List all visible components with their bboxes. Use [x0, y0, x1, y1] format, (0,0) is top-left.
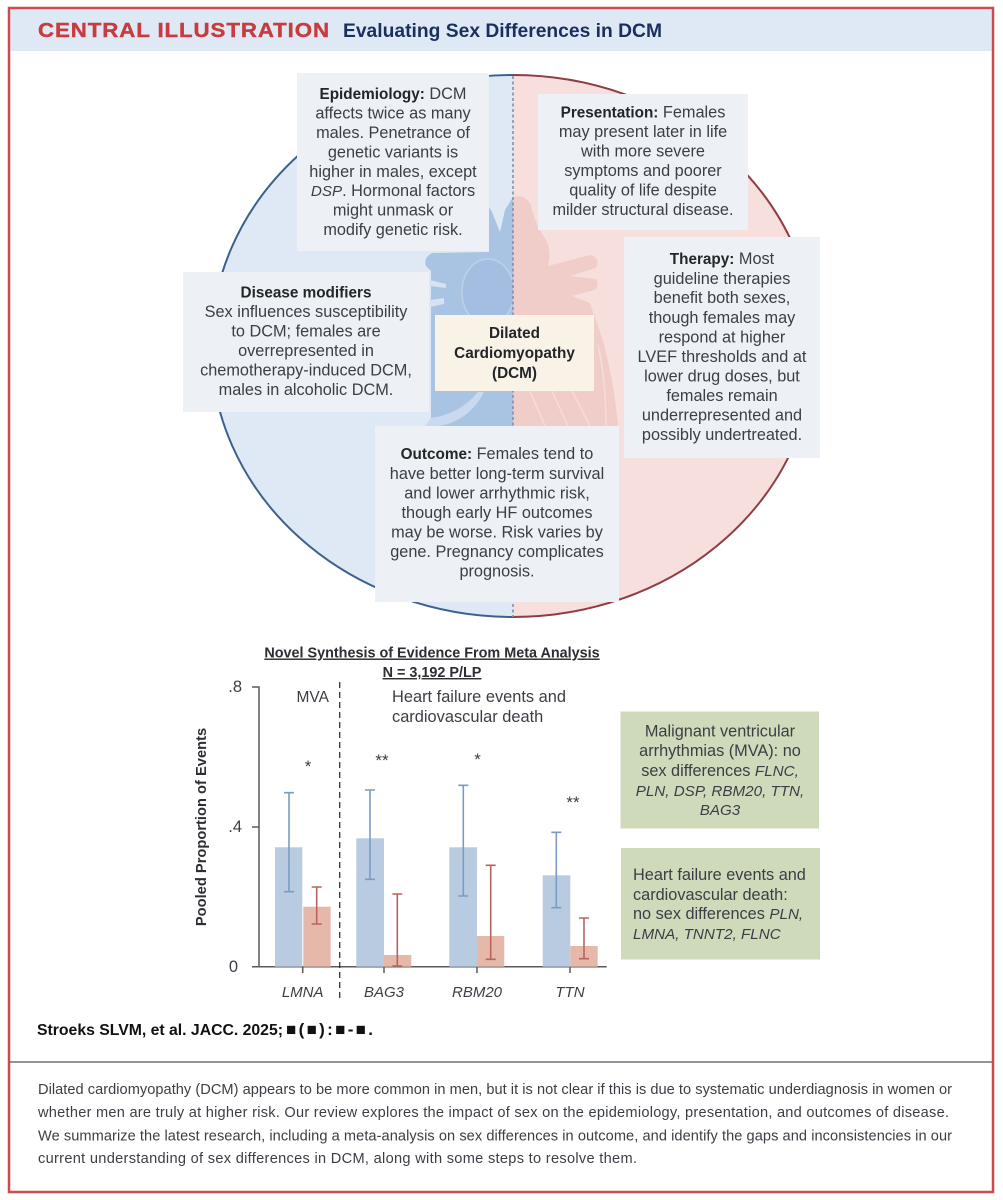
panel: disease modifiers: Sex influences susceptibility: [205, 303, 408, 321]
gene labels: BAG3: [364, 984, 405, 1001]
panel: epidemiology: affects twice as many: [315, 104, 472, 122]
bar chart: [194, 678, 607, 1001]
panel: dilated cardiomyopathy label: Cardiomyopathy: [454, 345, 575, 362]
panel: therapy: possibly undertreated.: [642, 426, 802, 444]
callout: heart failure events: no sex differences PLN,: [633, 905, 803, 923]
subtitle: Evaluating Sex Differences in DCM: [343, 20, 662, 42]
panel: outcome: and lower arrhythmic risk,: [404, 484, 590, 502]
panel: epidemiology: might unmask or: [333, 202, 454, 220]
callout: heart failure events: [621, 848, 820, 960]
female half: [513, 75, 815, 617]
citation: ■(■):■-■.: [286, 1020, 373, 1039]
summary text: [37, 1082, 952, 1167]
panel: therapy: [624, 237, 820, 458]
circle outline: female side: [513, 75, 815, 617]
significance markers: *: [305, 757, 312, 776]
panel: presentation: milder structural disease.: [553, 201, 733, 219]
panel: presentation: with more severe: [580, 142, 705, 160]
group labels: cardiovascular death: [392, 708, 543, 726]
header band: [10, 10, 992, 51]
callout: heart failure events: cardiovascular death:: [633, 886, 788, 904]
panel: disease modifiers: chemotherapy-induced DCM,: [200, 362, 412, 380]
panel: presentation: quality of life despite: [569, 182, 717, 200]
gene labels: LMNA: [282, 984, 324, 1001]
axes: [252, 687, 607, 973]
group divider: [339, 682, 341, 998]
callout: malignant ventricular arrhythmias: [620, 712, 819, 828]
panel: epidemiology: males. Penetrance of: [316, 124, 470, 142]
gene labels: [282, 984, 585, 1001]
panel: therapy: though females may: [649, 309, 796, 327]
panel: epidemiology: genetic variants is: [328, 144, 458, 162]
group labels: MVA: [296, 689, 330, 706]
callout: malignant ventricular arrhythmias: BAG3: [700, 802, 741, 819]
panel: disease modifiers: [183, 272, 429, 412]
panel: outcome: [375, 426, 619, 602]
gene labels: TTN: [555, 984, 585, 1001]
panel: therapy: Therapy: Most: [670, 250, 775, 268]
panel: epidemiology: [297, 73, 489, 251]
chart heading: [264, 646, 600, 681]
callout: malignant ventricular arrhythmias: Malignant ventricular: [645, 722, 796, 740]
y axis title: Pooled Proportion of Events: [194, 728, 210, 926]
panel: outcome: may be worse. Risk varies by: [391, 524, 604, 542]
panel: dilated cardiomyopathy label: [435, 315, 594, 391]
panel: epidemiology: Epidemiology: DCM: [320, 85, 466, 103]
callout: malignant ventricular arrhythmias: sex differences FLNC,: [641, 762, 799, 780]
significance markers: **: [566, 793, 580, 812]
chart heading: N = 3,192 P/LP: [383, 665, 482, 681]
center dashed divider: [512, 76, 514, 617]
bars: BAG3: [356, 790, 411, 967]
panel: presentation: symptoms and poorer: [564, 162, 722, 180]
panel: therapy: females remain: [666, 387, 778, 405]
significance markers: **: [375, 751, 389, 770]
callout: heart failure events: Heart failure events and: [633, 866, 806, 884]
male half: [211, 75, 513, 617]
panel: disease modifiers: overrepresented in: [238, 342, 374, 360]
panel: epidemiology: higher in males, except: [309, 163, 477, 181]
y axis ticks: 0: [229, 958, 238, 976]
panel: outcome: prognosis.: [459, 562, 535, 580]
heart: red side: [513, 196, 618, 426]
panel: therapy: benefit both sexes,: [654, 289, 790, 307]
callout: malignant ventricular arrhythmias: PLN, DSP, RBM20, TTN,: [636, 783, 804, 800]
summary text: current understanding of sex differences in DCM, along with some steps to resolve them.: [38, 1151, 637, 1167]
panel: disease modifiers: to DCM; females are: [231, 322, 381, 340]
significance markers: [305, 750, 580, 812]
citation: [37, 1020, 373, 1039]
y axis ticks: .8: [228, 678, 242, 696]
gene labels: RBM20: [452, 984, 503, 1001]
panel: outcome: gene. Pregnancy complicates: [390, 543, 604, 561]
panel: disease modifiers: males in alcoholic DCM.: [219, 381, 393, 399]
summary text: We summarize the latest research, including a meta-analysis on sex differences in outcome, and identify the gaps and inconsistencies in our: [38, 1128, 952, 1144]
title: central illustration: CENTRAL ILLUSTRATION: [38, 20, 330, 42]
summary text: whether men are truly at higher risk. Our review explores the impact of sex on the epidemiology, presentation, and outcomes of disease.: [37, 1105, 949, 1121]
heart: blue side: [425, 197, 514, 426]
panel: disease modifiers: Disease modifiers: [241, 284, 371, 302]
summary text: Dilated cardiomyopathy (DCM) appears to be more common in men, but it is not clear if this is due to systematic underdiagnosis in women or: [38, 1082, 952, 1098]
split circle diagram: [211, 75, 815, 617]
panel: therapy: guideline therapies: [654, 270, 790, 288]
group labels: [296, 688, 566, 726]
significance markers: *: [474, 750, 481, 769]
panel: dilated cardiomyopathy label: Dilated: [489, 325, 540, 342]
panel: epidemiology: modify genetic risk.: [323, 221, 463, 239]
bars: TTN: [543, 832, 598, 967]
panel: presentation: [538, 94, 748, 230]
citation: Stroeks SLVM, et al. JACC. 2025;: [37, 1022, 283, 1039]
group labels: Heart failure events and: [392, 688, 566, 706]
y axis ticks: [228, 678, 242, 976]
panel: therapy: lower drug doses, but: [644, 368, 800, 386]
panel: outcome: though early HF outcomes: [402, 504, 592, 522]
bars: LMNA: [275, 793, 331, 967]
callout: malignant ventricular arrhythmias: arrhythmias (MVA): no: [639, 742, 801, 760]
panel: epidemiology: DSP. Hormonal factors: [311, 182, 475, 200]
panel: therapy: underrepresented and: [642, 406, 802, 424]
callout: heart failure events: LMNA, TNNT2, FLNC: [633, 926, 782, 943]
y axis ticks: .4: [228, 818, 242, 836]
panel: outcome: have better long-term survival: [390, 465, 604, 483]
bars: RBM20: [449, 785, 504, 967]
panel: therapy: respond at higher: [659, 328, 786, 346]
circle outline: male side: [211, 75, 513, 617]
panel: presentation: Presentation: Females: [561, 104, 725, 122]
panel: outcome: Outcome: Females tend to: [401, 445, 593, 463]
panel: therapy: LVEF thresholds and at: [638, 348, 807, 366]
panel: presentation: may present later in life: [559, 123, 727, 141]
panel: dilated cardiomyopathy label: (DCM): [492, 365, 537, 382]
chart heading: Novel Synthesis of Evidence From Meta Analysis: [264, 646, 600, 662]
